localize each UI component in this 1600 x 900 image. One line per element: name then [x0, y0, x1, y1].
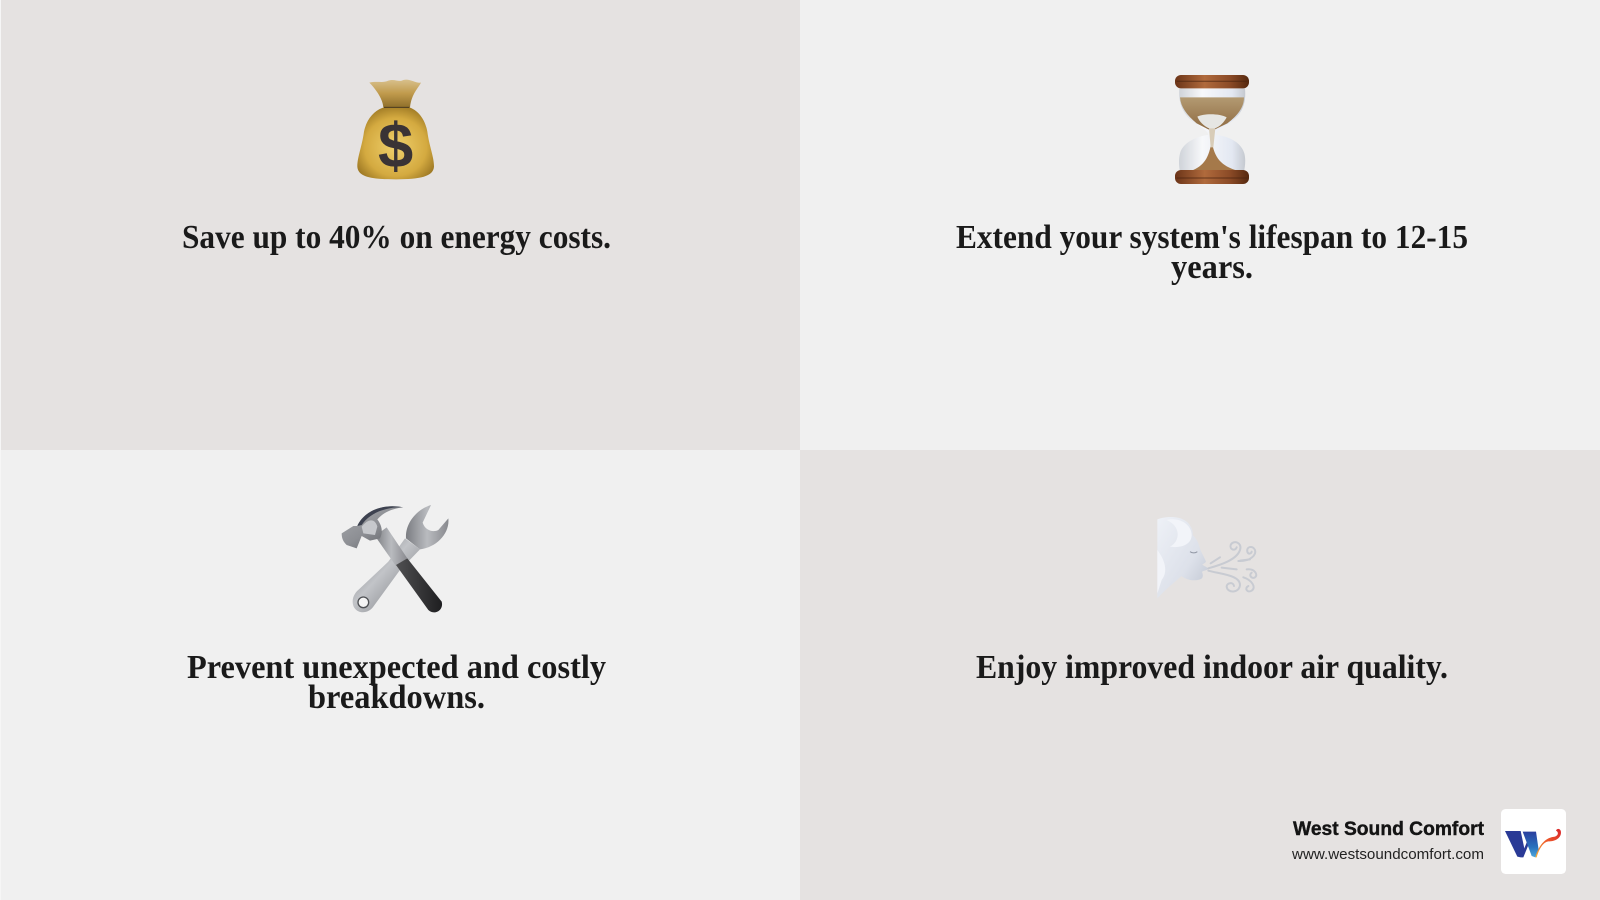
panel: air quality — [800, 450, 1600, 900]
icon: money bag — [357, 80, 434, 181]
logo badge — [1501, 809, 1566, 874]
website url: www.westsoundcomfort.com — [1291, 846, 1484, 863]
heading: prevent breakdowns: Prevent unexpected and costly — [187, 649, 606, 686]
panel: system lifespan — [800, 0, 1600, 450]
panel: prevent breakdowns — [0, 450, 800, 900]
heading: system lifespan: Extend your system's lifespan to 12-15 — [956, 219, 1468, 256]
icon: money bag: $ — [378, 111, 413, 181]
heading: system lifespan: years. — [1171, 249, 1253, 286]
heading: prevent breakdowns — [187, 649, 606, 716]
panel: energy savings — [0, 0, 800, 450]
heading: system lifespan — [956, 219, 1468, 286]
heading: prevent breakdowns: breakdowns. — [308, 679, 485, 716]
left edge strip — [0, 0, 1, 900]
heading: energy savings: Save up to 40% on energy costs. — [182, 219, 611, 256]
icon: hourglass — [1175, 75, 1249, 184]
heading: air quality: Enjoy improved indoor air quality. — [976, 649, 1448, 686]
icon: wind face — [1157, 517, 1256, 598]
brand name: West Sound Comfort — [1293, 819, 1485, 840]
icon: hammer and wrench — [342, 505, 448, 612]
